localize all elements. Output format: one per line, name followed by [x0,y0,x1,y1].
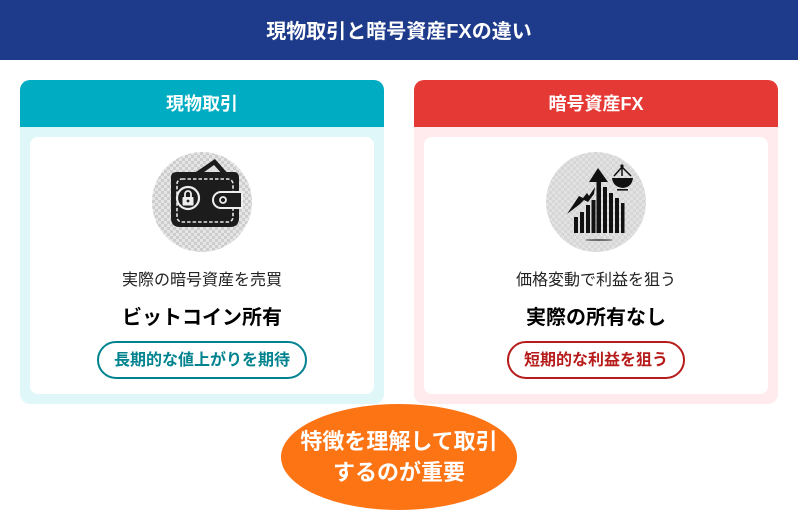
card: crypto FX [424,137,768,394]
heading: spot trading [20,80,384,127]
callout: conclusion: するのが重要 [333,460,465,485]
icon: wallet with lock [152,152,252,252]
pill: spot trading goal [97,341,307,379]
key point: crypto FX: 実際の所有なし [526,307,666,329]
card: spot trading [30,137,374,394]
pill: crypto FX goal [507,341,685,379]
description: spot trading: 実際の暗号資産を売買 [122,272,282,289]
heading: crypto FX [414,80,778,127]
icon: rising chart with scales [546,152,646,252]
pill: spot trading goal: 長期的な値上がりを期待 [114,352,290,369]
pill: crypto FX goal: 短期的な利益を狙う [524,352,668,369]
title banner [0,0,798,60]
description: crypto FX: 価格変動で利益を狙う [516,272,676,289]
callout: conclusion: 特徴を理解して取引 [300,429,498,454]
heading: spot trading: 現物取引 [166,94,238,114]
title banner: 現物取引と暗号資産FXの違い [266,21,532,43]
callout: conclusion [281,404,517,510]
key point: spot trading: ビットコイン所有 [122,307,282,329]
heading: crypto FX: 暗号資産FX [548,94,644,114]
panel: crypto FX [414,80,778,404]
panel: spot trading [20,80,384,404]
